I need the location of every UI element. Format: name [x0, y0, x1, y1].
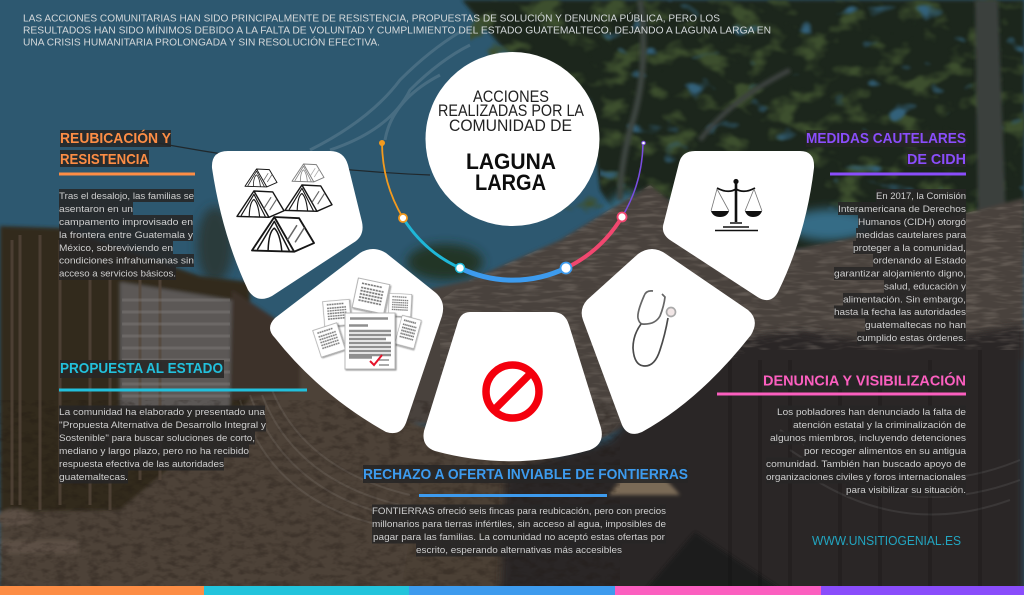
body text: En 2017, la Comisión [876, 191, 966, 201]
heading: RECHAZO A OFERTA INVIABLE DE FONTIERRAS [363, 466, 688, 483]
body text [834, 189, 967, 344]
structural fills [380, 185, 1024, 440]
body text: FONTIERRAS ofreció seis fincas para reubicación, pero con precios [372, 506, 666, 516]
intro text [23, 12, 771, 49]
body text: organizaciones civiles y foros internacionales [766, 472, 966, 482]
body text: algunos miembros, incluyendo detenciones [770, 433, 966, 443]
body text: escrito, esperando alternativas más accesibles [416, 545, 622, 555]
section: Propuesta al Estado [59, 360, 307, 484]
icon: scales of justice [711, 179, 762, 230]
heading [717, 371, 966, 396]
heading [363, 465, 688, 497]
intro text: LAS ACCIONES COMUNITARIAS HAN SIDO PRINCIPALMENTE DE RESISTENCIA, PROPUESTAS DE SOLUCIÓN Y DENUNCIA PÚBLICA, PERO LOS [23, 12, 720, 25]
arc timeline [379, 140, 645, 280]
section: Medidas cautelares de CIDH [806, 130, 967, 344]
intro text: UNA CRISIS HUMANITARIA PROLONGADA Y SIN RESOLUCIÓN EFECTIVA. [23, 36, 380, 49]
central title circle [426, 52, 600, 226]
intro text: RESULTADOS HAN SIDO MÍNIMOS DEBIDO A LA FALTA DE VOLUNTAD Y CUMPLIMIENTO DEL ESTADO GUATEMALTECO, DEJANDO A LAGUNA LARGA EN [23, 24, 771, 37]
heading: REUBICACIÓN Y [60, 129, 171, 147]
title: Laguna Larga [466, 149, 556, 195]
body text: para visibilizar su situación. [846, 485, 966, 495]
panel: scales card [663, 151, 814, 300]
body text: proteger a la comunidad, [853, 243, 966, 253]
body text: Sostenible" para buscar soluciones de corto, [59, 433, 255, 443]
body text: guatemaltecas. [59, 472, 128, 482]
body text [59, 189, 194, 280]
body text: México, sobreviviendo en [59, 243, 173, 253]
body text: la frontera entre Guatemala y [59, 230, 193, 240]
body text: pagar para las familias. La comunidad no aceptó estas ofertas por [373, 532, 665, 542]
title: Laguna Larga: LARGA [475, 170, 546, 195]
body text: respuesta efectiva de las autoridades [59, 459, 224, 469]
body text: La comunidad ha elaborado y presentado una [59, 407, 266, 417]
title: acciones: REALIZADAS POR LA [438, 101, 585, 120]
heading [59, 129, 195, 176]
body text: Interamericana de Derechos [838, 204, 966, 214]
body text: medidas cautelares para [856, 230, 967, 240]
body text: por recoger alimentos en su antigua [804, 446, 967, 456]
body text: cumplido estas órdenes. [857, 333, 966, 343]
body text: asentaron en un [59, 204, 133, 214]
body text: garantizar alojamiento digno, [834, 268, 966, 278]
icon: tents [237, 164, 332, 252]
heading: MEDIDAS CAUTELARES [806, 130, 966, 147]
title: acciones [438, 87, 585, 135]
body text: millonarios para tierras infértiles, sin acceso al agua, imposibles de [372, 519, 666, 529]
panel: tents card [212, 151, 363, 299]
title: acciones: COMUNIDAD DE [449, 116, 572, 135]
panel: stethoscope card [582, 249, 755, 434]
body text: alimentación. Sin embargo, [843, 294, 966, 304]
body text [59, 406, 266, 484]
title: acciones: ACCIONES [473, 87, 549, 106]
body text: salud, educación y [884, 282, 966, 292]
body text: "Propuesta Alternativa de Desarrollo Integral y [59, 420, 266, 430]
website link: WWW.UNSITIOGENIAL.ES [812, 533, 961, 548]
body text: acceso a servicios básicos. [59, 268, 176, 278]
body text: atención estatal y la criminalización de [793, 420, 966, 430]
body text: campamento improvisado en [59, 217, 193, 227]
heading: RESISTENCIA [60, 151, 149, 168]
icon: documents [313, 278, 421, 369]
body text [372, 504, 666, 556]
body text: mediano y largo plazo, pero no ha recibido [59, 446, 249, 456]
body text: condiciones infrahumanas sin [59, 256, 194, 266]
body text: Humanos (CIDH) otorgó [858, 217, 966, 227]
body text: hasta la fecha las autoridades [834, 307, 966, 317]
body text: Los pobladores han denunciado la falta de [777, 407, 966, 417]
title: Laguna Larga: LAGUNA [466, 149, 556, 174]
body text: guatemaltecas no han [865, 320, 966, 330]
heading [59, 360, 307, 392]
bottom colour bar [0, 586, 1024, 595]
section: Rechazo a oferta inviable de Fontierras [363, 465, 688, 556]
body text: ordenando al Estado [873, 256, 966, 266]
heading [806, 130, 966, 176]
heading: PROPUESTA AL ESTADO [60, 360, 223, 377]
heading: DENUNCIA Y VISIBILIZACIÓN [763, 372, 966, 390]
body text: comunidad. También han buscado apoyo de [766, 459, 966, 469]
section: Denuncia y visibilización [717, 371, 967, 496]
body text [766, 406, 967, 496]
section: Reubicación y resistencia [59, 129, 195, 280]
panel: rejection card [423, 312, 602, 461]
body text: Tras el desalojo, las familias se [59, 191, 194, 201]
panel: documents card [270, 249, 443, 433]
icon: prohibited sign [486, 365, 539, 418]
heading: DE CIDH [907, 151, 966, 168]
icon: stethoscope [633, 291, 676, 366]
